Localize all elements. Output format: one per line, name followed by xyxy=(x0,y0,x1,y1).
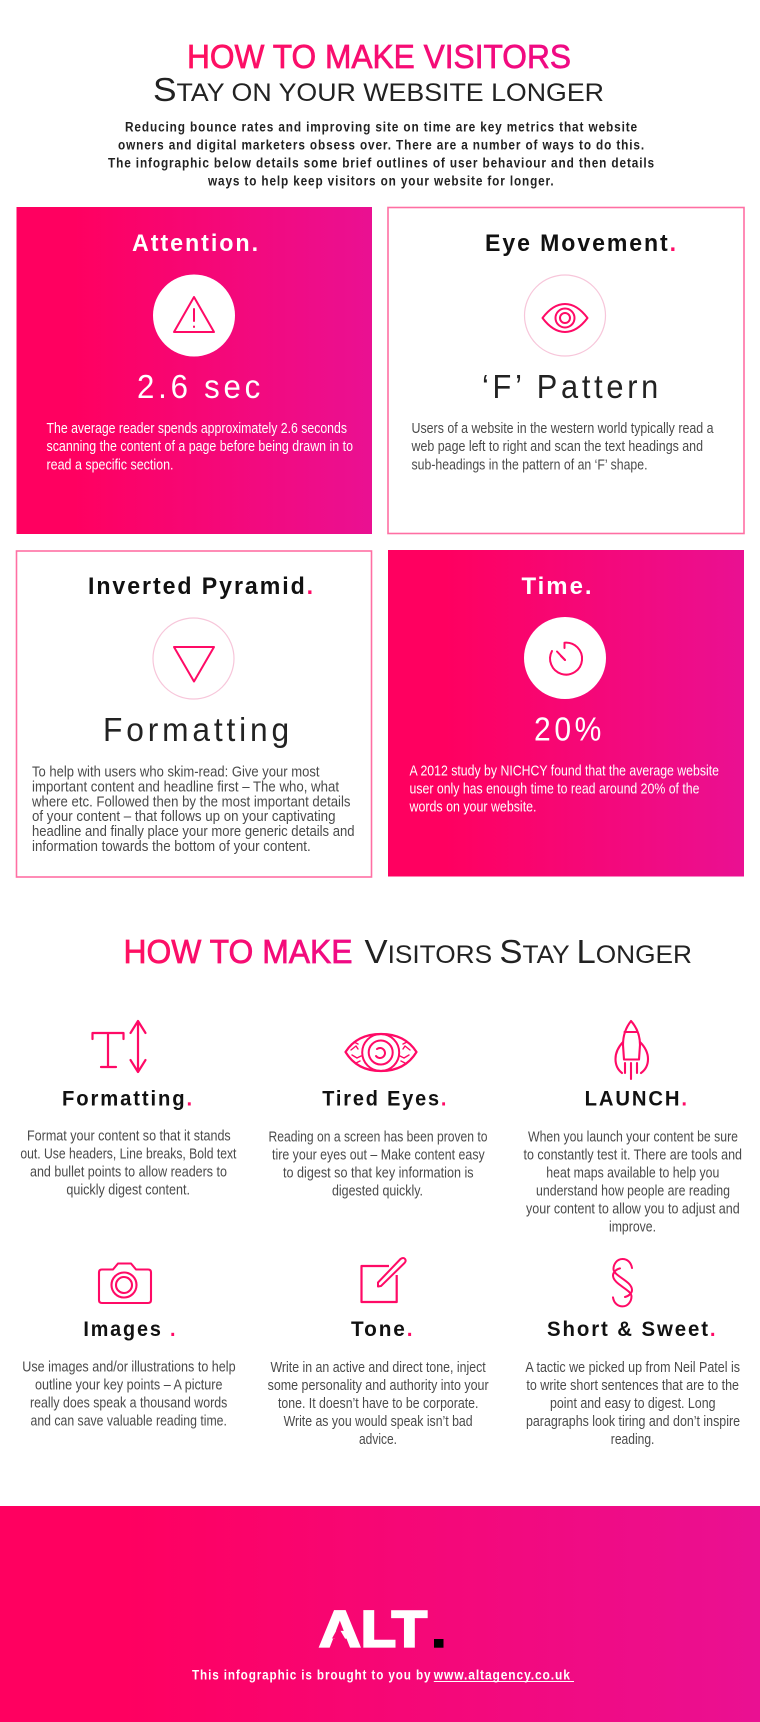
text: images description: outline your key points – A picture xyxy=(35,1376,222,1393)
title: HOW TO MAKE VISITORS xyxy=(187,38,571,75)
icon: inverted triangle xyxy=(153,618,234,699)
text: tone description: tone. It doesn’t have to be corporate. xyxy=(278,1395,478,1412)
icon: rocket xyxy=(616,1021,648,1079)
tip: launch xyxy=(524,1021,742,1235)
text: formatting description: Format your content so that it stands xyxy=(27,1128,231,1145)
stat: 20%: 20% xyxy=(534,710,605,748)
footer credit: www.altagency.co.uk xyxy=(433,1667,571,1682)
heading: inverted pyramid: Inverted Pyramid. xyxy=(88,573,315,600)
text: launch description: improve. xyxy=(609,1218,656,1235)
text: formatting description: and bullet points to allow readers to xyxy=(30,1164,227,1181)
icon: tired eye xyxy=(346,1034,416,1071)
text: inverted pyramid description: information towards the bottom of your content. xyxy=(32,838,311,855)
stat: F pattern: ‘F’ Pattern xyxy=(482,368,662,405)
icon: section sign xyxy=(613,1259,632,1306)
title: STAY ON YOUR WEBSITE LONGER xyxy=(153,71,604,108)
text: formatting description xyxy=(20,1128,237,1199)
text: short and sweet description xyxy=(525,1359,740,1448)
text: tired eyes description: digested quickly. xyxy=(332,1182,423,1199)
text: tone description xyxy=(268,1359,489,1448)
text: time description: user only has enough time to read around 20% of the xyxy=(410,781,700,798)
text: tone description: some personality and authority into your xyxy=(268,1377,489,1394)
panel: inverted pyramid xyxy=(16,551,372,877)
text: time description xyxy=(409,763,719,816)
text: eye movement description: web page left to right and scan the text headings and xyxy=(411,438,703,455)
panel: time xyxy=(388,550,744,876)
text: inverted pyramid description: headline and finally place your more generic details and xyxy=(32,823,354,840)
text: short and sweet description: point and easy to digest. Long xyxy=(550,1395,716,1412)
panel: eye movement xyxy=(388,208,744,534)
text: tone description: Write as you would speak isn’t bad xyxy=(284,1413,473,1430)
intro text: owners and digital marketers obsess over. There are a number of ways to do this. xyxy=(118,138,645,152)
text: attention description: scanning the content of a page before being drawn in to xyxy=(46,438,353,455)
icon: notepad and pen xyxy=(362,1258,406,1302)
text: short and sweet description: reading. xyxy=(611,1431,654,1448)
text: tired eyes description: to digest so that key information is xyxy=(283,1164,474,1181)
heading: time: Time. xyxy=(522,573,594,600)
title xyxy=(153,38,604,108)
text: inverted pyramid description: of your content – that follows up on your captivating xyxy=(32,808,336,825)
text: time description: words on your website. xyxy=(409,799,536,816)
intro text: The infographic below details some brief outlines of user behaviour and then details xyxy=(108,156,655,170)
text: inverted pyramid description: To help with users who skim-read: Give your most xyxy=(32,764,320,780)
panel: attention xyxy=(16,207,372,534)
heading: images: Images . xyxy=(83,1317,177,1341)
text: attention description: read a specific section. xyxy=(46,456,174,474)
text: eye movement description: sub-headings in the pattern of an ‘F’ shape. xyxy=(412,456,648,474)
heading: attention: Attention. xyxy=(132,230,260,257)
section heading: HOW TO MAKE xyxy=(124,933,352,970)
icon: camera xyxy=(99,1264,151,1303)
intro text: Reducing bounce rates and improving site on time are key metrics that website xyxy=(125,120,638,134)
text: tone description: advice. xyxy=(359,1431,397,1448)
text: formatting description: out. Use headers, Line breaks, Bold text xyxy=(20,1146,237,1163)
tip: formatting xyxy=(20,1021,237,1199)
text: tired eyes description xyxy=(268,1128,488,1199)
text: attention description xyxy=(46,420,353,474)
heading: tone: Tone. xyxy=(351,1317,414,1341)
intro text: ways to help keep visitors on your website for longer. xyxy=(207,174,554,188)
tip: tone xyxy=(268,1258,489,1448)
section heading xyxy=(124,933,692,970)
stat: 2.6 sec: 2.6 sec xyxy=(137,368,264,405)
stat: formatting: Formatting xyxy=(103,711,293,748)
tip: short and sweet xyxy=(525,1259,740,1448)
text: inverted pyramid description: important content and headline first – The who, what xyxy=(32,778,340,796)
logo: ALT: ALT xyxy=(319,1601,427,1658)
heading: formatting: Formatting. xyxy=(62,1086,194,1110)
heading: eye movement: Eye Movement. xyxy=(485,230,678,257)
text: attention description: The average reader spends approximately 2.6 seconds xyxy=(46,420,347,437)
text: inverted pyramid description xyxy=(31,764,355,855)
icon: timer xyxy=(524,617,606,699)
text: tired eyes description: Reading on a screen has been proven to xyxy=(268,1128,488,1145)
icon: warning triangle xyxy=(153,274,235,356)
text: eye movement description xyxy=(411,420,714,474)
text: images description: really does speak a thousand words xyxy=(30,1394,227,1411)
heading: launch: LAUNCH. xyxy=(585,1086,689,1110)
tip: tired eyes xyxy=(268,1034,488,1199)
text: launch description: heat maps available to help you xyxy=(546,1164,719,1181)
text: launch description xyxy=(524,1128,742,1235)
text: images description: Use images and/or illustrations to help xyxy=(22,1358,236,1375)
icon: text height xyxy=(92,1021,146,1072)
section heading: VISITORS STAY LONGER xyxy=(364,933,692,970)
text: images description xyxy=(22,1358,236,1429)
text: formatting description: quickly digest content. xyxy=(66,1182,190,1199)
text: inverted pyramid description: where etc. Followed then by the most important details xyxy=(31,794,351,810)
footer credit: This infographic is brought to you by xyxy=(192,1667,431,1682)
text: tired eyes description: tire your eyes out – Make content easy xyxy=(272,1146,485,1163)
text: images description: and can save valuable reading time. xyxy=(30,1412,227,1429)
text: tone description: Write in an active and direct tone, inject xyxy=(270,1359,486,1376)
tip: images xyxy=(22,1264,236,1429)
intro text xyxy=(108,120,655,188)
heading: short and sweet: Short & Sweet. xyxy=(547,1317,718,1341)
icon: eye xyxy=(524,275,606,356)
heading: tired eyes: Tired Eyes. xyxy=(322,1086,448,1110)
footer band xyxy=(0,1506,760,1722)
